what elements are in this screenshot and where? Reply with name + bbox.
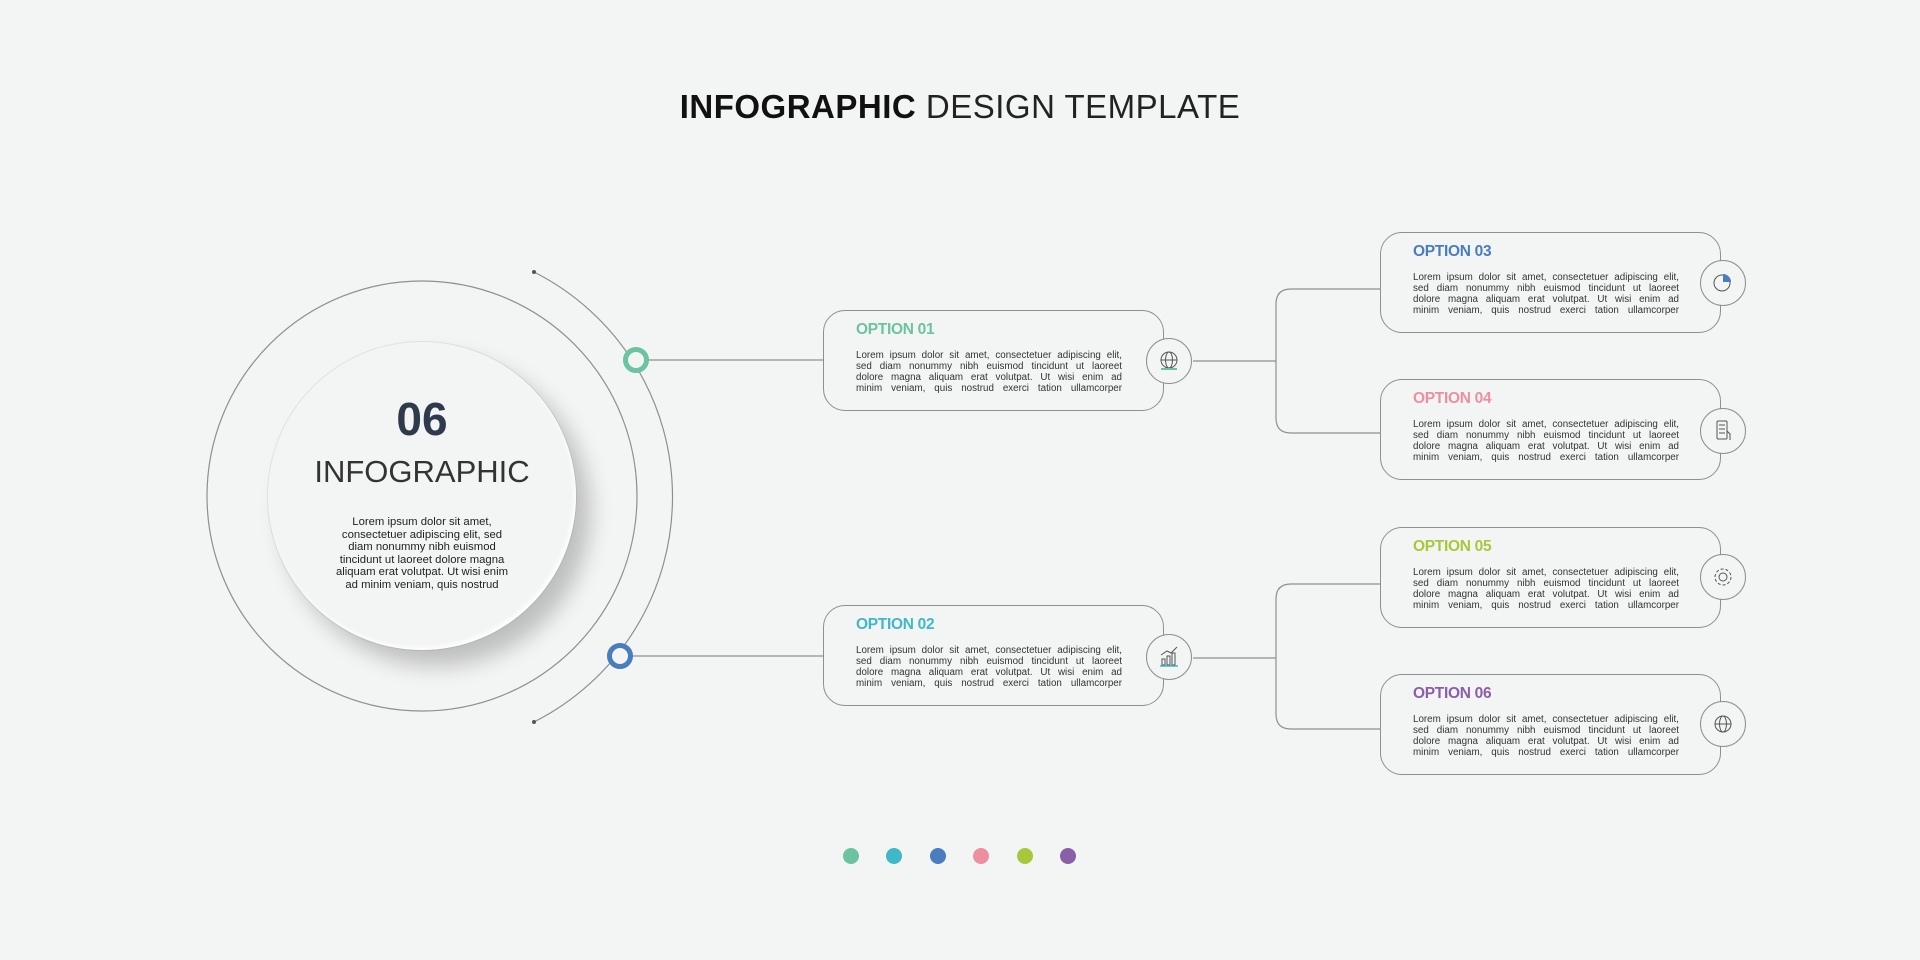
panel: option 06: minim veniam, quis nostrud exerci tation ullamcorper [1413, 747, 1679, 758]
panel: option 03 [1380, 232, 1721, 333]
icon: network globe [1700, 701, 1746, 747]
body text: Lorem ipsum dolor sit amet, [352, 516, 492, 528]
body text [336, 516, 508, 591]
body text: ad minim veniam, quis nostrud [345, 579, 499, 591]
panel: option 01 [823, 310, 1164, 411]
icon: globe [1146, 338, 1192, 384]
panel: option 02: minim veniam, quis nostrud exerci tation ullamcorper [856, 678, 1122, 689]
body text: tincidunt ut laoreet dolore magna [340, 554, 504, 566]
body text: consectetuer adipiscing elit, sed [342, 529, 502, 541]
panel: option 04: Lorem ipsum dolor sit amet, consectetuer adipiscing elit, [1413, 419, 1679, 430]
panel: option 04: dolore magna aliquam erat volutpat. Ut wisi enim ad [1413, 441, 1679, 452]
panel: option 04 [1380, 379, 1721, 480]
panel: option 05: dolore magna aliquam erat volutpat. Ut wisi enim ad [1413, 589, 1679, 600]
panel: option 03: OPTION 03 [1413, 243, 1491, 260]
panel: option 04: minim veniam, quis nostrud exerci tation ullamcorper [1413, 452, 1679, 463]
panel: option 03: minim veniam, quis nostrud exerci tation ullamcorper [1413, 305, 1679, 316]
panel: option 02: OPTION 02 [856, 616, 934, 633]
body text: aliquam erat volutpat. Ut wisi enim [336, 566, 508, 578]
panel: option 05: minim veniam, quis nostrud exerci tation ullamcorper [1413, 600, 1679, 611]
icon: pie [1700, 260, 1746, 306]
panel: option 03: Lorem ipsum dolor sit amet, consectetuer adipiscing elit, [1413, 272, 1679, 283]
icon: gear [1700, 554, 1746, 600]
title: INFOGRAPHIC DESIGN TEMPLATE [680, 88, 1240, 125]
central disc [268, 342, 576, 650]
icon: chart [1146, 634, 1192, 680]
panel: option 02: dolore magna aliquam erat volutpat. Ut wisi enim ad [856, 667, 1122, 678]
marker: blue ring [607, 643, 633, 669]
panel: option 05: sed diam nonummy nibh euismod tincidunt ut laoreet [1413, 578, 1679, 589]
panel: option 06: Lorem ipsum dolor sit amet, consectetuer adipiscing elit, [1413, 714, 1679, 725]
panel: option 01: minim veniam, quis nostrud exerci tation ullamcorper [856, 383, 1122, 394]
panel: option 05: Lorem ipsum dolor sit amet, consectetuer adipiscing elit, [1413, 567, 1679, 578]
panel: option 01: sed diam nonummy nibh euismod tincidunt ut laoreet [856, 361, 1122, 372]
panel: option 01: Lorem ipsum dolor sit amet, consectetuer adipiscing elit, [856, 350, 1122, 361]
panel: option 02: Lorem ipsum dolor sit amet, consectetuer adipiscing elit, [856, 645, 1122, 656]
panel: option 05 [1380, 527, 1721, 628]
panel: option 06: sed diam nonummy nibh euismod tincidunt ut laoreet [1413, 725, 1679, 736]
panel: option 04: sed diam nonummy nibh euismod tincidunt ut laoreet [1413, 430, 1679, 441]
panel: option 02: sed diam nonummy nibh euismod tincidunt ut laoreet [856, 656, 1122, 667]
legend dots [843, 848, 1076, 864]
number: 06 [396, 393, 448, 445]
panel: option 06: dolore magna aliquam erat volutpat. Ut wisi enim ad [1413, 736, 1679, 747]
marker: green ring [623, 347, 649, 373]
heading: INFOGRAPHIC [314, 454, 530, 489]
panel: option 06: OPTION 06 [1413, 685, 1491, 702]
icon: phone [1700, 408, 1746, 454]
body text: diam nonummy nibh euismod [348, 541, 496, 553]
panel: option 05: OPTION 05 [1413, 538, 1491, 555]
panel: option 02 [823, 605, 1164, 706]
panel: option 04: OPTION 04 [1413, 390, 1491, 407]
panel: option 01: OPTION 01 [856, 321, 934, 338]
panel: option 01: dolore magna aliquam erat volutpat. Ut wisi enim ad [856, 372, 1122, 383]
panel: option 03: sed diam nonummy nibh euismod tincidunt ut laoreet [1413, 283, 1679, 294]
panel: option 06 [1380, 674, 1721, 775]
panel: option 03: dolore magna aliquam erat volutpat. Ut wisi enim ad [1413, 294, 1679, 305]
